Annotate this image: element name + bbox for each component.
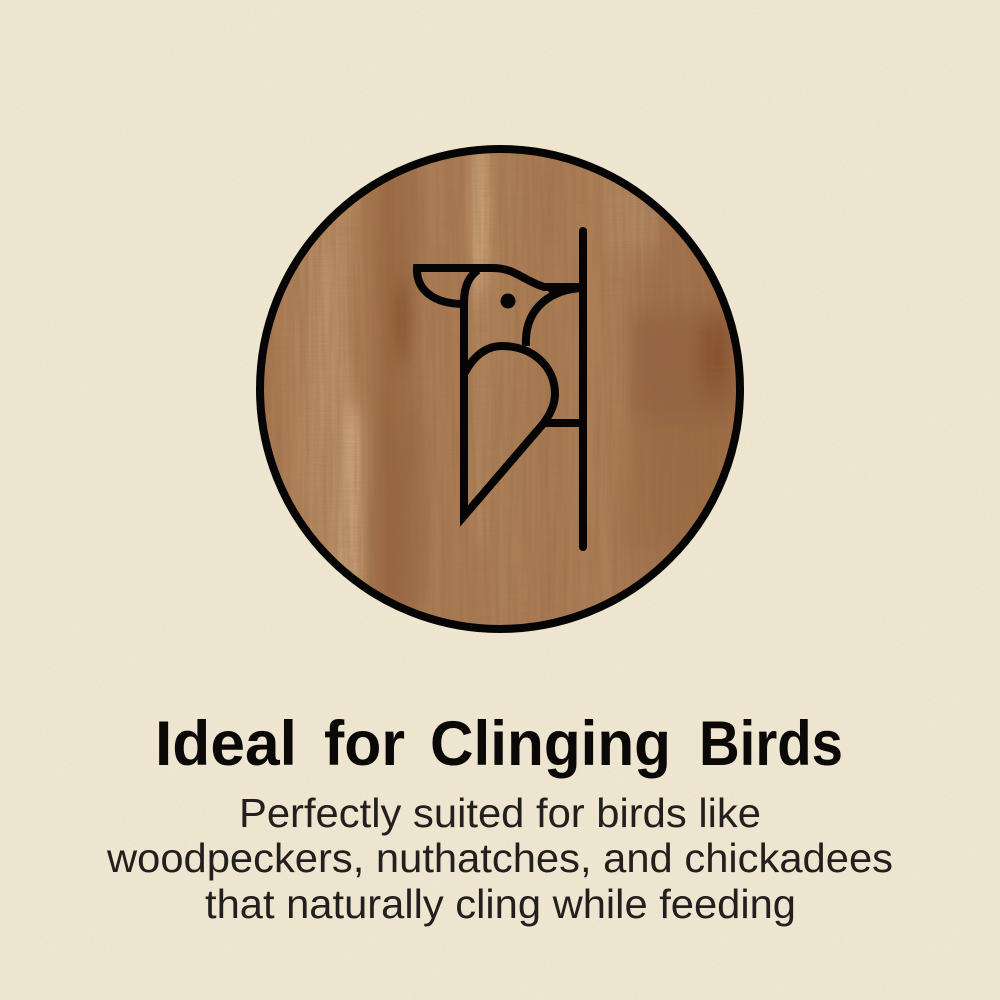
panel: wood disc (256, 140, 744, 633)
beak fill (541, 285, 580, 296)
throat (526, 288, 580, 346)
eye (500, 294, 516, 308)
title: Ideal (155, 709, 297, 779)
text block: description (106, 790, 893, 927)
body and tail (464, 346, 555, 516)
trunk line (579, 231, 587, 547)
icon: woodpecker on trunk (417, 231, 583, 547)
title: Clinging (430, 709, 671, 779)
leg (545, 419, 582, 427)
text block: description: that naturally cling while feeding (205, 881, 796, 927)
text block: description: Perfectly suited for birds like (239, 790, 761, 836)
head back (464, 270, 478, 400)
title (155, 709, 843, 779)
title: Birds (699, 709, 843, 779)
text block: description: woodpeckers, nuthatches, and chickadees (106, 835, 893, 881)
title: for (324, 709, 405, 779)
crest and head top with beak (417, 268, 580, 304)
